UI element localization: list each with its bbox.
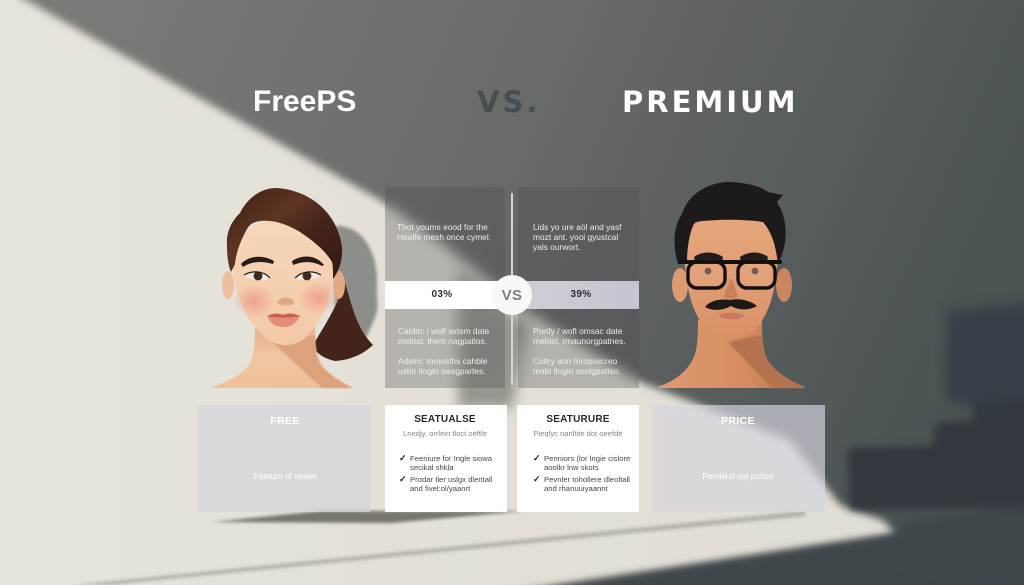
text block: free details: melost. them nagpatios. <box>398 336 487 346</box>
text block: premium details: Coltry aon Inroipaicreo <box>533 356 617 366</box>
title: PREMIUM: PREMIUM <box>622 85 798 119</box>
feature list: aoolkr lnw skots <box>544 463 599 472</box>
card note: Feeturn of oexiel <box>254 471 316 481</box>
card: premium feature list <box>517 405 639 512</box>
text block: premium intro: yals ourwort. <box>533 242 580 252</box>
title: FreePS: FreePS <box>253 85 356 118</box>
text block: free details: usbir tlogin swsgpartes. <box>398 366 486 376</box>
vertical divider <box>511 193 513 385</box>
card heading: SEATURURE <box>546 414 610 425</box>
stat band: premium 39%: 39% <box>571 289 591 300</box>
comparison panel: premium column <box>518 187 639 388</box>
text block: free intro: Healfe mesh once cymel. <box>397 232 491 242</box>
text block: premium intro <box>533 222 622 252</box>
stat band: free 03%: 03% <box>432 289 452 300</box>
text block: free intro <box>397 222 491 242</box>
feature list: ✓ <box>399 453 407 463</box>
text block: premium details: Pretfy / wofl omsac date <box>533 326 622 336</box>
card heading: PRICE: PRICE <box>721 415 755 427</box>
feature list: ✓ <box>399 474 407 484</box>
text block: free details <box>398 326 489 376</box>
feature list: Feeniure for Ingle siowa <box>410 454 492 463</box>
card: FREE <box>198 405 370 512</box>
feature list <box>533 453 630 493</box>
card subheading: Pieqlyc nanltite dot oeefde <box>533 429 623 438</box>
card heading: FREE: FREE <box>270 415 300 427</box>
stat band: free 03% <box>385 281 505 309</box>
text block: premium intro: Lids yo ure aöl and yasf <box>533 222 621 232</box>
VS badge: VS <box>502 287 522 304</box>
card subheading: Lnedjy, orrlein tloct oeftle <box>403 429 487 438</box>
text block: premium details <box>533 326 626 376</box>
text block: premium details: mabi tlogin sostgpatiso. <box>533 366 621 376</box>
text block: premium intro: mozt ant. yool gyustcal <box>533 232 618 242</box>
feature list: Penniors (lor lngie cislore <box>544 454 630 463</box>
stat band: premium 39% <box>512 281 639 309</box>
text block: free details: Adelm: tomesths cahble <box>398 356 487 366</box>
feature list: secikal shkla <box>410 463 454 472</box>
card: PRICE <box>653 405 825 512</box>
woman drawing <box>213 188 377 388</box>
title: vs.: VS. <box>477 85 540 119</box>
feature list: and rhanuuiyaannt <box>544 484 608 493</box>
feature list: ✓ <box>533 474 541 484</box>
feature list: Pevnler tohollere dleoltall <box>544 475 630 484</box>
card: free feature list <box>385 405 507 512</box>
text block: free intro: Thot youms eood for the <box>397 222 488 232</box>
feature list: ✓ <box>533 453 541 463</box>
card note: Pemishd oal potion <box>702 471 774 481</box>
card heading: SEATUALSE <box>414 414 476 425</box>
VS badge <box>492 275 532 315</box>
feature list <box>399 453 492 493</box>
feature list: Prodar tler uslgx dleritall <box>410 475 492 484</box>
text block: free details: Caldm: i wofl axtsm date <box>398 326 489 336</box>
text block: premium details: melost. rmaunorgpatnes. <box>533 336 626 346</box>
feature list: and fivel:ol/yaanrt <box>410 484 470 493</box>
comparison panel: free column <box>385 187 505 388</box>
